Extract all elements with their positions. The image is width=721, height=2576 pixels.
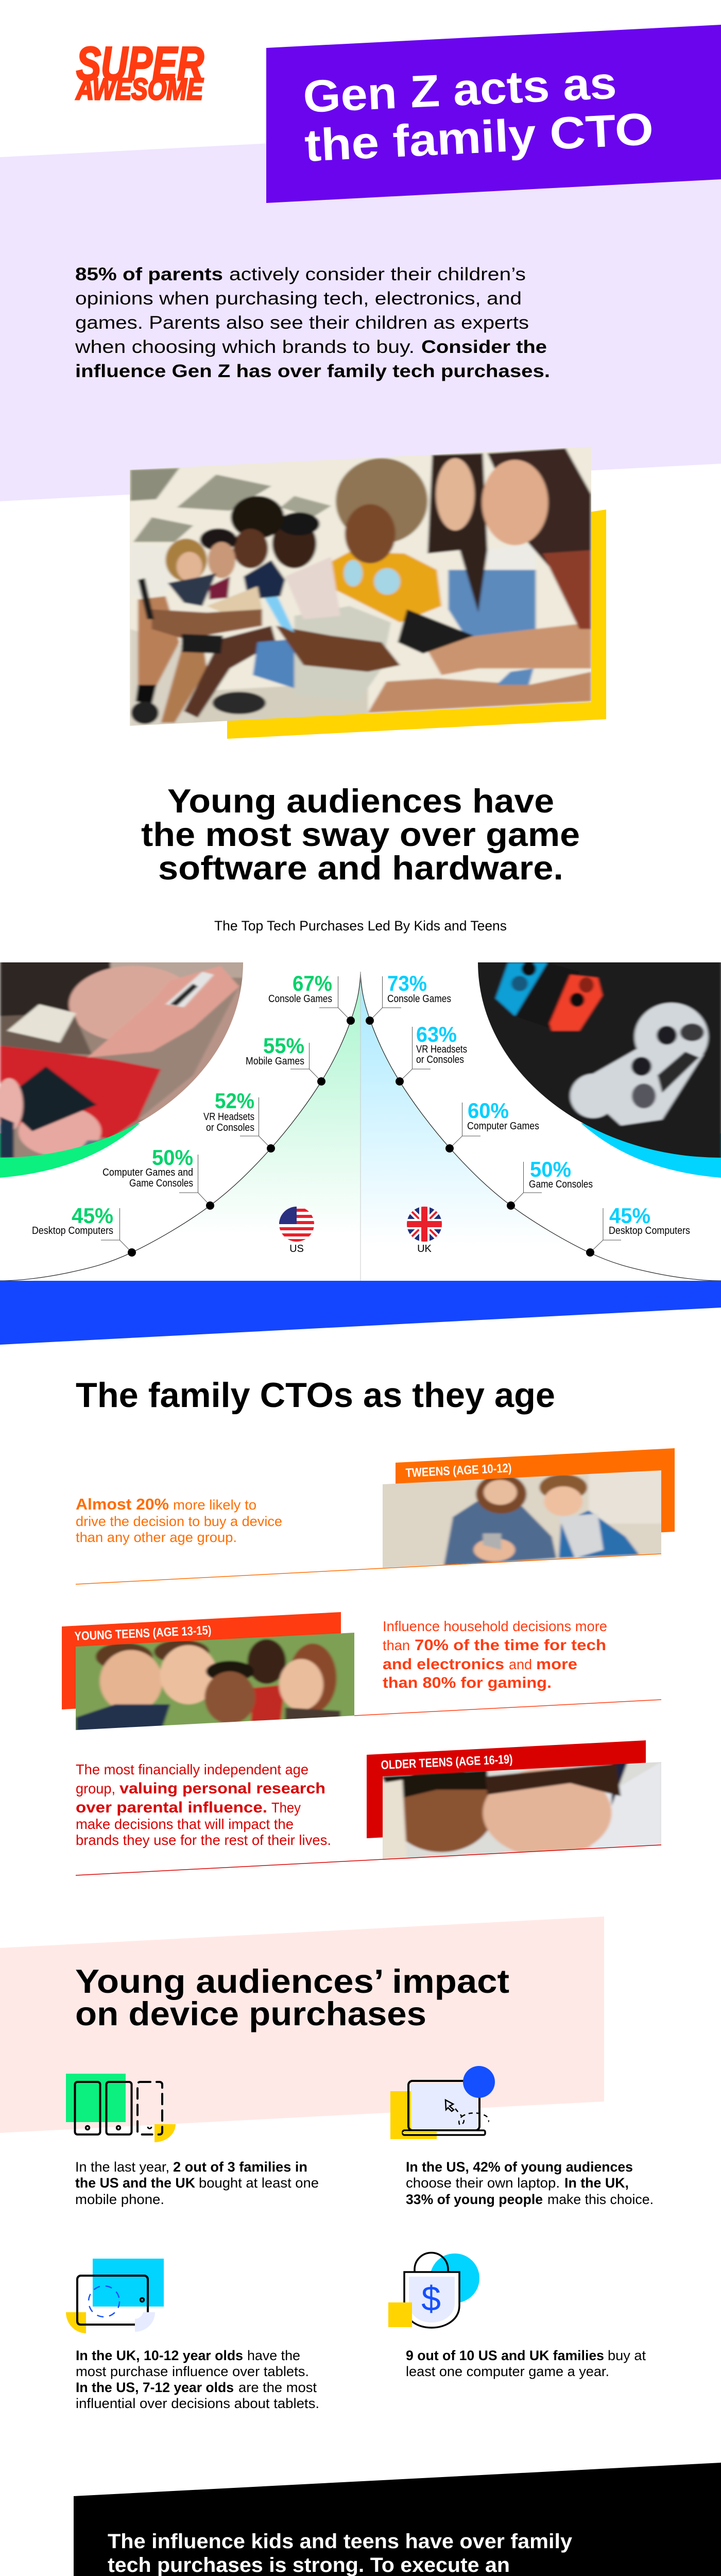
stat: computer games: least one computer game a year. [406,2364,609,2379]
intro paragraph: opinions when purchasing tech, electronics, and [75,289,522,309]
icon: shopping bag with dollar: $ [421,2279,441,2318]
title text: the family CTO [303,103,655,171]
panel: older teens [76,1740,664,1875]
photo: two older teens [380,1758,664,1863]
title text: Gen Z acts as [302,57,617,122]
heading: young audiences sway [141,782,580,887]
young teens label tab [62,1612,341,1709]
UK chart labels: 63% [416,1022,457,1046]
stat: mobile phones: 2 out of 3 families in [173,2159,307,2175]
young teens label text: YOUNG TEENS (AGE 13-15) [74,1623,212,1643]
stat: mobile phones [75,2159,319,2207]
young teens description: Influence household decisions more [383,1618,607,1634]
tweens description: than any other age group. [76,1530,237,1545]
stat: laptops: make this choice. [547,2192,654,2207]
young teens description: than 80% for gaming. [383,1674,552,1691]
stat: laptops: In the US, 42% of young audiences [406,2159,633,2175]
icon: UK flag: UK [417,1243,432,1255]
intro paragraph: influence Gen Z has over family tech purchases. [75,361,550,381]
stat: tablets: In the US, 7-12 year olds [76,2380,234,2395]
young teens description [383,1618,607,1691]
UK chart labels: Console Games [387,993,451,1005]
young teens description: than [383,1637,410,1653]
young teens description: 70% of the time for tech [415,1637,606,1654]
heading: impact on device purchases: Young audiences’ impact [75,1962,509,2000]
UK chart labels: Game Consoles [529,1179,593,1190]
older teens description: brands they use for the rest of their lives. [76,1832,331,1848]
tweens label text: TWEENS (AGE 10-12) [405,1461,512,1480]
US chart labels: VR Headsets [203,1111,254,1123]
stat: tablets: In the UK, 10-12 year olds [76,2348,243,2363]
logo: SuperAwesome [75,38,204,106]
US chart labels [32,971,332,1236]
heading: young audiences sway: software and hardware. [158,849,563,887]
photo: five young teens selfie [74,1630,358,1732]
intro paragraph [75,264,550,381]
intro paragraph: when choosing which brands to buy. [75,337,415,357]
older teens description: group, [76,1781,115,1797]
older teens description: over parental influence. [76,1799,267,1816]
stat: tablets: are the most [238,2380,317,2395]
older teens description: valuing personal research [119,1780,325,1797]
intro paragraph: Consider the [421,337,547,357]
UK chart labels: Computer Games [467,1121,539,1132]
tweens description: drive the decision to buy a device [76,1514,282,1529]
heading: family CTOs as they age: The family CTOs as they age [76,1376,555,1415]
background: lavender band [0,120,721,501]
intro paragraph: games. Parents also see their children as experts [75,313,529,333]
title panel [266,25,721,203]
young teens description: and electronics [383,1656,504,1673]
stat: tablets: influential over decisions about tablets. [76,2396,319,2411]
stat: tablets: have the [247,2348,300,2363]
heading: impact on device purchases: on device purchases [75,1995,426,2032]
young teens description: and [509,1656,532,1672]
photo: group of teens with phones [124,442,598,731]
icon: US flag: US [289,1243,304,1255]
heading: impact on device purchases [75,1962,509,2032]
UK chart labels: 73% [387,971,427,995]
older teens description [76,1761,331,1848]
US chart labels: 45% [72,1204,113,1228]
intro paragraph: 85% of parents [75,264,223,284]
US chart labels: 50% [152,1145,193,1170]
accent: cyan crescent [581,1123,721,1178]
US chart labels: 52% [215,1089,254,1113]
US chart labels: Game Consoles [129,1178,193,1189]
UK chart labels: 60% [468,1098,509,1123]
young teens description: more [536,1656,577,1673]
UK chart labels: or Consoles [416,1054,464,1065]
stat: computer games [406,2348,646,2379]
heading: young audiences sway: Young audiences have [167,782,554,820]
heading: young audiences sway: the most sway over game [141,816,580,853]
callout text: tech purchases is strong. To execute an [108,2554,510,2576]
stat: mobile phones: bought at least one [199,2175,319,2191]
stat: tablets [76,2348,319,2411]
US chart labels: Console Games [268,993,332,1005]
older teens description: The most financially independent age [76,1761,308,1777]
tweens description: Almost 20% [76,1495,169,1513]
icon: shopping bag with dollar [388,2252,479,2328]
logo: SuperAwesome: AWESOME [75,73,204,106]
icon: laptop [390,2066,495,2139]
stat: mobile phones: the US and the UK [75,2175,195,2191]
US chart labels: or Consoles [206,1122,254,1133]
stat: computer games: 9 out of 10 US and UK families [406,2348,604,2363]
stat: laptops: 33% of young people [406,2192,543,2207]
title text [302,57,655,171]
photo accent: yellow [227,510,606,739]
older teens description: make decisions that will impact the [76,1816,294,1832]
US chart labels: Mobile Games [246,1056,304,1067]
UK chart labels: VR Headsets [416,1044,467,1055]
background: pink impact band [0,1917,604,2133]
UK chart labels [387,971,690,1236]
photo: hands holding game controller [0,960,248,1164]
photo: girl and boy with devices [380,1466,664,1571]
background: lower pink section [0,2563,721,2576]
US chart labels: Computer Games and [102,1167,193,1178]
chart: US and UK purchase curves [0,972,721,1281]
stat: mobile phones: In the last year, [75,2159,169,2175]
icon: mobile phones [66,2074,176,2142]
US chart labels: Desktop Computers [32,1225,113,1236]
icon: tablet [66,2259,164,2333]
intro paragraph: actively consider their children’s [229,264,526,284]
stat: mobile phones: mobile phone. [75,2192,164,2207]
tweens label tab [396,1448,675,1546]
US chart labels: 55% [263,1033,304,1058]
stat: laptops: In the UK, [564,2175,629,2191]
older teens description: They [271,1800,301,1816]
logo: SuperAwesome: SUPER [76,38,204,90]
tweens description: more likely to [173,1497,256,1513]
blue divider band [0,1281,721,1345]
stat: tablets: most purchase influence over tablets. [76,2364,309,2379]
US chart labels: 67% [293,971,332,995]
UK chart labels: 50% [530,1157,571,1181]
stat: laptops: choose their own laptop. [406,2175,560,2191]
accent: green crescent [0,1123,140,1178]
UK chart labels: 45% [609,1204,650,1228]
icon: US flag [279,1207,314,1255]
chart subtitle: The Top Tech Purchases Led By Kids and Teens [214,918,507,934]
stat: laptops [406,2159,654,2207]
panel: influence callout [74,2463,721,2576]
photo: console controllers [474,960,721,1164]
icon: UK flag [407,1207,442,1255]
panel: young teens [62,1612,661,1732]
callout text: The influence kids and teens have over family [108,2530,573,2553]
panel: tweens [76,1448,675,1584]
older teens label tab [367,1740,646,1838]
stat: computer games: buy at [608,2348,646,2363]
callout text [108,2530,573,2576]
older teens label text: OLDER TEENS (AGE 16-19) [381,1752,513,1772]
tweens description [76,1495,282,1545]
UK chart labels: Desktop Computers [609,1225,690,1236]
